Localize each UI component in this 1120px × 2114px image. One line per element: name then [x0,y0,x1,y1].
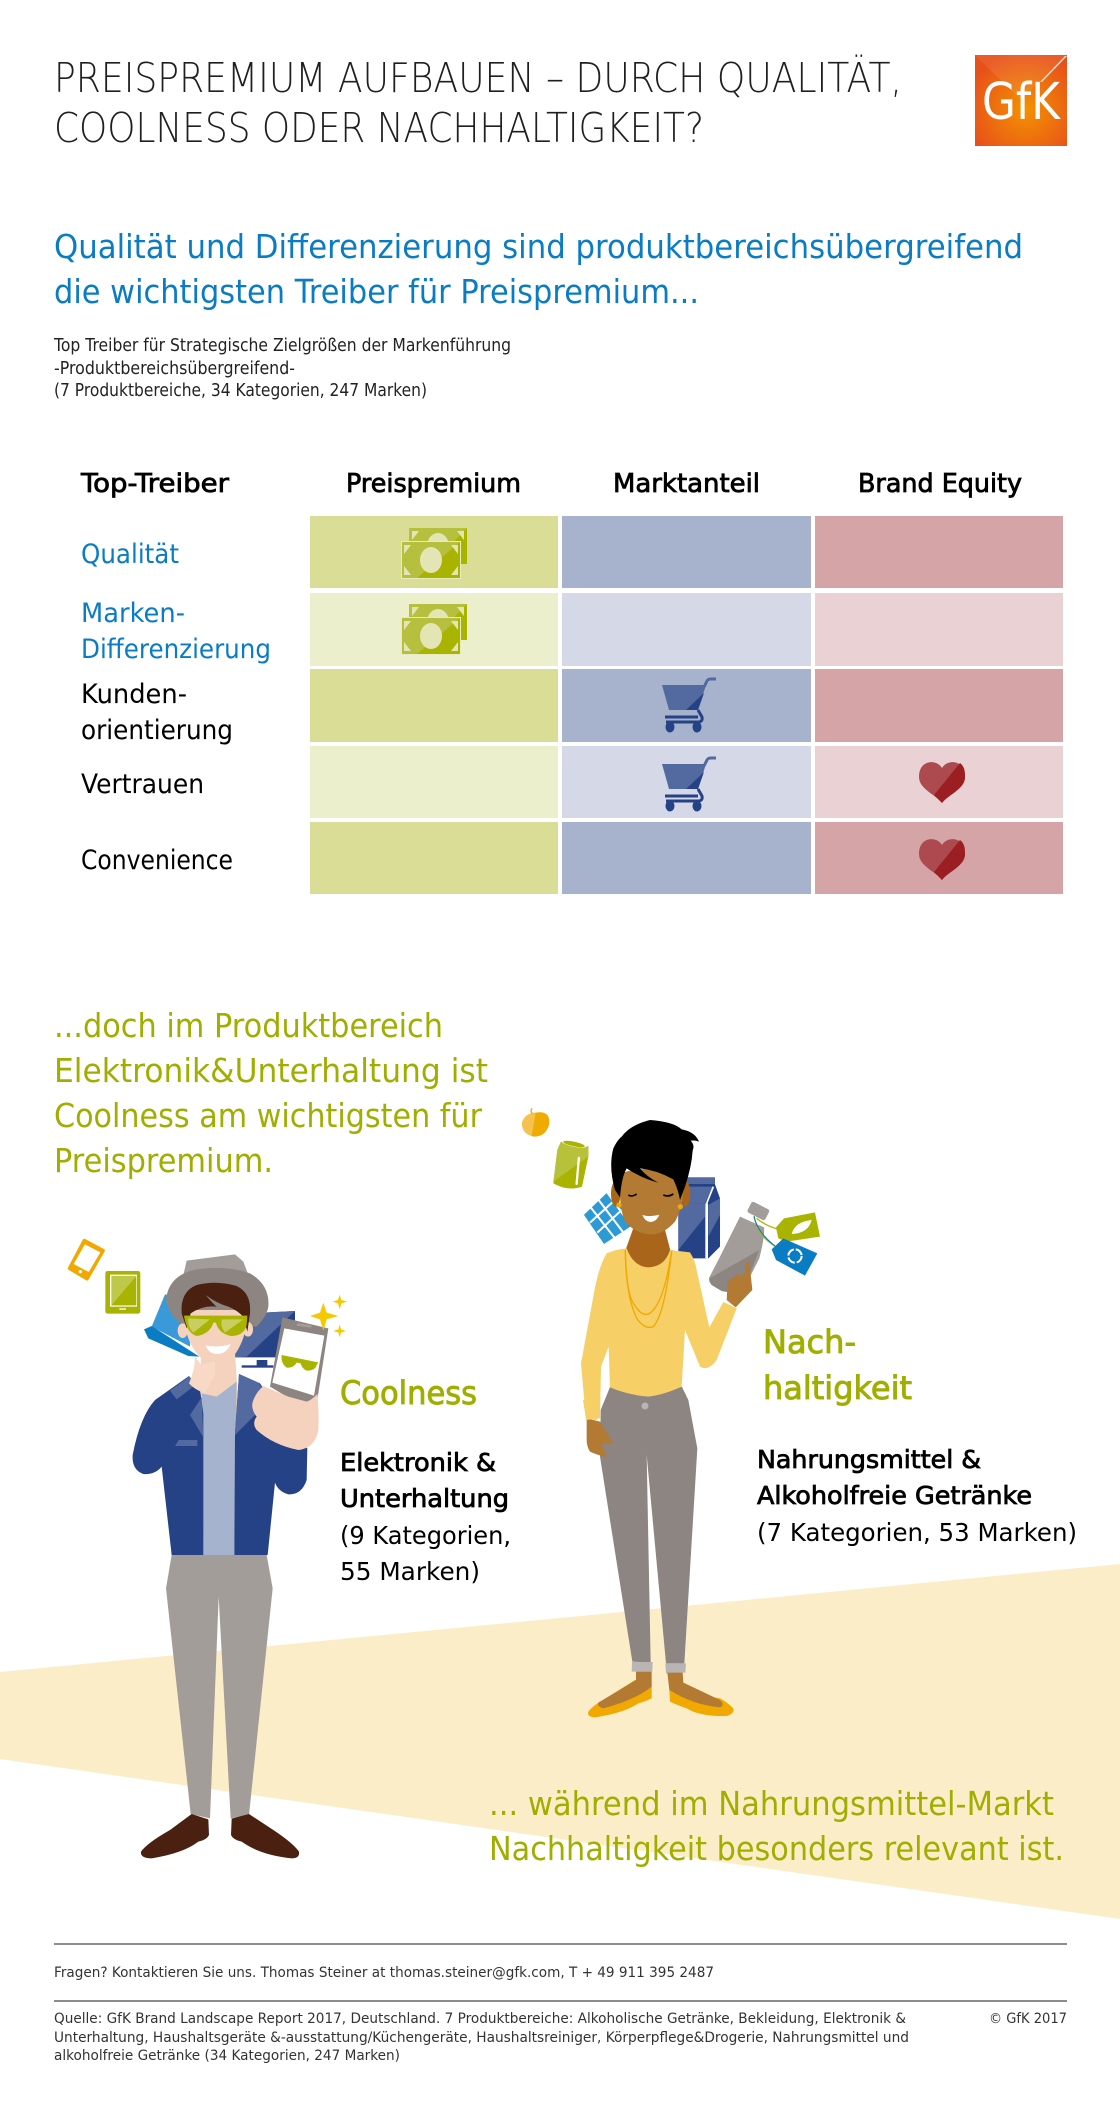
hand with phone [252,1386,319,1450]
button [642,1402,648,1410]
chart description: Top Treiber für Strategische Zielgrößen der Markenführung [53,335,511,356]
text: Elektronik category [340,1448,511,1586]
chart description: -Produktbereichsübergreifend- [54,358,295,379]
text: Elektronik category: 55 Marken) [340,1557,480,1586]
icon: heart, Convenience [919,839,965,880]
label: Nachhaltigkeit: haltigkeit [763,1369,912,1407]
subheading: blue: die wichtigsten Treiber für Preispremium... [54,272,699,311]
icon: cart, Kundenorientierung [662,679,716,732]
table header: Top-Treiber [80,469,229,499]
row label: Vertrauen: Vertrauen [81,769,204,800]
chart description [53,335,511,401]
source note [54,2011,909,2064]
driver table [80,469,1063,894]
source note: Unterhaltung, Haushaltsgeräte &-ausstattung/Küchengeräte, Haushaltsreiniger, Körperpflege&Drogerie, Nahrungsmittel und [54,2030,909,2046]
table cells [310,516,1063,894]
table header [80,469,1022,499]
green statement: Nachhaltigkeit [489,1784,1064,1868]
icon: cart, Vertrauen [662,758,716,812]
row label: Marken-Differenzierung: Differenzierung [81,634,271,665]
label: Nachhaltigkeit [763,1323,912,1407]
source note: Quelle: GfK Brand Landscape Report 2017, Deutschland. 7 Produktbereiche: Alkoholische Getränke, Bekleidung, Elektronik & [54,2011,906,2027]
illustration: man with phone [70,1241,347,1858]
green statement: Coolness: Preispremium. [54,1141,273,1180]
text: Elektronik category: (9 Kategorien, [340,1521,511,1550]
text: Nahrungsmittel category [757,1445,1077,1547]
row label: Convenience: Convenience [81,845,233,876]
text: Elektronik category: Unterhaltung [340,1484,509,1513]
icon: money, Differenzierung [401,604,467,655]
text: Nahrungsmittel category: (7 Kategorien, 53 Marken) [757,1518,1077,1547]
text: Elektronik category: Elektronik & [340,1448,496,1477]
icon: money, Qualität [401,528,467,579]
sunglasses [184,1316,247,1336]
hand on chin [189,1357,215,1393]
row label: Kundenorientierung: Kunden- [81,679,187,710]
copyright: © GfK 2017 [989,2011,1067,2027]
row label: Marken-Differenzierung [81,598,271,665]
label: Nachhaltigkeit: Nach- [763,1323,856,1361]
device icons [70,1241,295,1368]
table header: Brand Equity [858,469,1022,499]
logo: GfK [975,55,1067,146]
green statement: Nachhaltigkeit: Nachhaltigkeit besonders relevant ist. [489,1829,1064,1868]
row label: Kundenorientierung: orientierung [81,715,233,746]
source note: alkoholfreie Getränke (34 Kategorien, 247 Marken) [54,2048,400,2064]
table header: Marktanteil [613,469,760,499]
sleeve end [583,1400,600,1420]
title: COOLNESS ODER NACHHALTIGKEIT? [54,104,704,152]
icon: heart, Vertrauen [919,762,965,803]
contact line: Fragen? Kontaktieren Sie uns. Thomas Steiner at thomas.steiner@gfk.com, T + 49 911 395 2487 [54,1965,714,1981]
subheading: blue [54,227,1023,311]
green statement: Coolness [54,1006,488,1180]
upper body [581,1120,752,1420]
green statement: Coolness: Coolness am wichtigsten für [54,1096,482,1135]
background band [0,1564,1120,1919]
upper body [133,1254,347,1555]
product icons [522,1108,820,1292]
trousers and feet [587,1387,734,1717]
text: Nahrungsmittel category: Nahrungsmittel & [757,1445,981,1474]
title: PREISPREMIUM AUFBAUEN – DURCH QUALITÄT, [54,54,902,102]
illustration: woman with bottle [522,1108,820,1717]
subheading: blue: Qualität und Differenzierung sind produktbereichsübergreifend [54,227,1023,266]
hat [183,1254,248,1275]
row label: Marken-Differenzierung: Marken- [81,598,185,629]
logo: GfK: GfK [982,73,1061,132]
green statement: Coolness: ...doch im Produktbereich [54,1006,443,1045]
table header: Preispremium [346,469,521,499]
text: Nahrungsmittel category: Alkoholfreie Getränke [757,1481,1032,1510]
row label: Qualität: Qualität [81,539,179,570]
label: Coolness: Coolness [340,1374,477,1412]
title [54,54,902,152]
row label: Kundenorientierung [81,679,233,746]
green statement: Coolness: Elektronik&Unterhaltung ist [54,1051,488,1090]
green statement: Nachhaltigkeit: ... während im Nahrungsmittel-Markt [489,1784,1054,1823]
head [178,1323,188,1338]
phone [270,1317,328,1408]
sparkles [310,1303,338,1331]
chart description: (7 Produktbereiche, 34 Kategorien, 247 Marken) [54,380,427,401]
trousers and shoes [141,1555,299,1858]
